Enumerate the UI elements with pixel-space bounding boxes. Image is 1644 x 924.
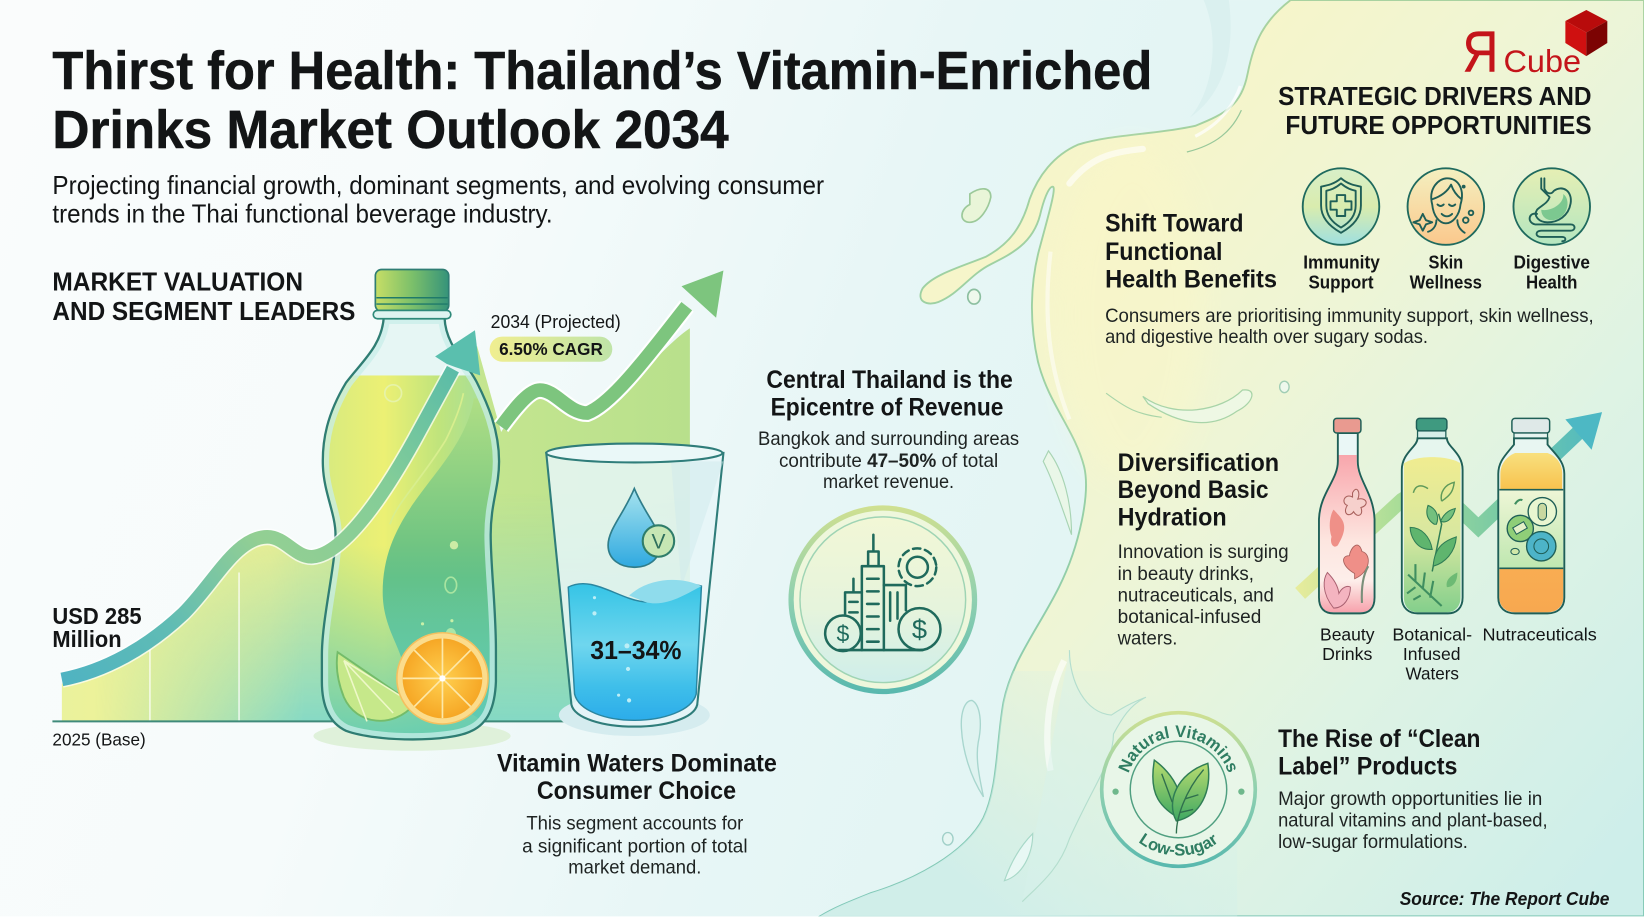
label: skin wellness: Wellness <box>1410 271 1482 292</box>
text: vitamin waters: This segment accounts for <box>526 812 744 834</box>
label: digestive health <box>1513 251 1590 292</box>
icon: vitamin drop <box>608 489 674 567</box>
text: central Thailand: contribute 47–50% of total <box>779 450 998 472</box>
subtitle <box>52 170 824 228</box>
orange slice <box>397 633 488 724</box>
badge: CAGR: 6.50% CAGR <box>499 339 603 359</box>
heading: shift toward functional <box>1105 210 1277 293</box>
label: USD 285 Million: Million <box>52 626 122 652</box>
panel: clean label <box>1100 710 1548 868</box>
labels: bottle names <box>1320 625 1597 683</box>
title: Thirst for Health: Thailand’s Vitamin-Enriched <box>52 42 1152 101</box>
badge: natural vitamins low-sugar: Low-Sugar <box>1139 833 1216 856</box>
body text: innovation: in beauty drinks, <box>1118 563 1254 585</box>
body text: innovation: nutraceuticals, and <box>1118 584 1274 606</box>
heading: diversification <box>1118 449 1279 531</box>
growth arrow over bottle <box>62 330 480 679</box>
badge: natural vitamins low-sugar: Natural Vitamins <box>1118 725 1236 772</box>
text: clean label: Major growth opportunities lie in <box>1278 788 1542 810</box>
section heading: strategic drivers: FUTURE OPPORTUNITIES <box>1285 110 1592 140</box>
text: central Thailand <box>758 366 1019 493</box>
label: USD 285 Million: USD 285 <box>52 603 142 629</box>
text: vitamin waters: Vitamin Waters Dominate <box>497 750 777 778</box>
label: skin wellness <box>1410 251 1482 292</box>
illustration: nutraceuticals bottle <box>1498 418 1564 613</box>
body text: innovation <box>1117 541 1289 649</box>
label: immunity support: Support <box>1308 271 1374 292</box>
value: 31-34%: 31–34% <box>590 635 682 665</box>
label: digestive health: Health <box>1526 271 1577 292</box>
illustration: beauty drink bottle <box>1319 418 1375 613</box>
illustration: botanical water bottle <box>1402 418 1463 613</box>
text: vitamin waters: Consumer Choice <box>537 777 736 805</box>
water <box>568 584 701 720</box>
panel: functional health <box>1105 168 1594 348</box>
section heading: market valuation <box>52 266 355 326</box>
labels: bottle names: Infused <box>1403 644 1461 664</box>
heading: diversification: Diversification <box>1118 449 1279 477</box>
label: immunity support: Immunity <box>1303 251 1380 272</box>
label: skin wellness: Skin <box>1429 251 1463 272</box>
logo: RCube: Cube <box>1504 44 1581 79</box>
body text: consumers: and digestive health over sugary sodas. <box>1105 326 1428 348</box>
label: digestive health: Digestive <box>1513 251 1590 272</box>
liquid splash background <box>818 0 1644 918</box>
text: vitamin waters: market demand. <box>568 856 701 878</box>
title <box>52 42 1152 160</box>
section heading: strategic drivers: STRATEGIC DRIVERS AND <box>1278 81 1592 111</box>
icon: skin face <box>1408 168 1484 245</box>
text: clean label: The Rise of “Clean <box>1278 725 1480 753</box>
subtitle: trends in the Thai functional beverage industry. <box>52 198 553 228</box>
text: clean label <box>1278 725 1548 853</box>
white strip at bottom edge <box>0 916 1644 924</box>
text: clean label: natural vitamins and plant-based, <box>1278 810 1548 832</box>
heading: shift toward functional: Functional <box>1105 238 1223 266</box>
icon: city revenue: $ <box>837 621 850 647</box>
lime wedge <box>337 652 414 721</box>
labels: bottle names: Drinks <box>1322 644 1373 664</box>
label: USD 285 Million <box>52 603 142 652</box>
labels: bottle names: Beauty <box>1320 625 1375 645</box>
text: central Thailand: Bangkok and surrounding areas <box>758 428 1019 450</box>
chart: market growth area <box>52 271 723 721</box>
text: central Thailand: Central Thailand is the <box>766 366 1013 394</box>
text: vitamin waters: a significant portion of total <box>522 835 748 857</box>
illustration: water glass <box>546 444 723 736</box>
text: clean label: low-sugar formulations. <box>1278 831 1468 853</box>
icon: immunity shield <box>1303 168 1379 245</box>
icon: vitamin drop: V <box>651 530 665 553</box>
badge: natural vitamins low-sugar <box>1100 710 1258 868</box>
body text: consumers: Consumers are prioritising immunity support, skin wellness, <box>1105 305 1594 327</box>
heading: shift toward functional: Health Benefits <box>1105 265 1277 293</box>
label: immunity support <box>1303 251 1380 292</box>
panel: diversification <box>1117 412 1602 683</box>
label: 2034 projected: 2034 (Projected) <box>491 311 621 332</box>
text: vitamin waters <box>497 750 777 878</box>
text: central Thailand: Epicentre of Revenue <box>771 394 1003 422</box>
labels: bottle names: Nutraceuticals <box>1483 625 1597 645</box>
label: 2025 base: 2025 (Base) <box>52 729 146 749</box>
heading: diversification: Beyond Basic <box>1118 476 1269 504</box>
logo: RCube: Я <box>1463 20 1498 84</box>
body text: innovation: Innovation is surging <box>1118 541 1289 563</box>
heading: diversification: Hydration <box>1118 503 1227 531</box>
icon: city revenue: $ <box>912 614 927 645</box>
badge: CAGR <box>490 337 612 362</box>
body text: consumers <box>1105 305 1594 348</box>
illustration: bottle <box>313 269 511 751</box>
body text: innovation: botanical-infused <box>1118 606 1261 628</box>
labels: bottle names: Botanical- <box>1392 625 1472 645</box>
heading: shift toward functional: Shift Toward <box>1105 210 1243 238</box>
section heading: market valuation: AND SEGMENT LEADERS <box>52 296 355 326</box>
body text: innovation: waters. <box>1117 627 1177 649</box>
section heading: strategic drivers <box>1278 81 1592 140</box>
subtitle: Projecting financial growth, dominant segments, and evolving consumer <box>52 170 824 200</box>
arrow: zigzag trend <box>1300 412 1602 593</box>
text: clean label: Label” Products <box>1278 752 1457 780</box>
source note: Source: The Report Cube <box>1400 888 1609 909</box>
text: central Thailand: market revenue. <box>823 471 954 493</box>
icon: digestive stomach <box>1513 168 1590 245</box>
section heading: market valuation: MARKET VALUATION <box>52 266 303 296</box>
icon: city revenue <box>788 505 977 694</box>
title: Drinks Market Outlook 2034 <box>52 101 729 160</box>
logo: RCube <box>1463 10 1607 84</box>
labels: bottle names: Waters <box>1405 663 1459 683</box>
